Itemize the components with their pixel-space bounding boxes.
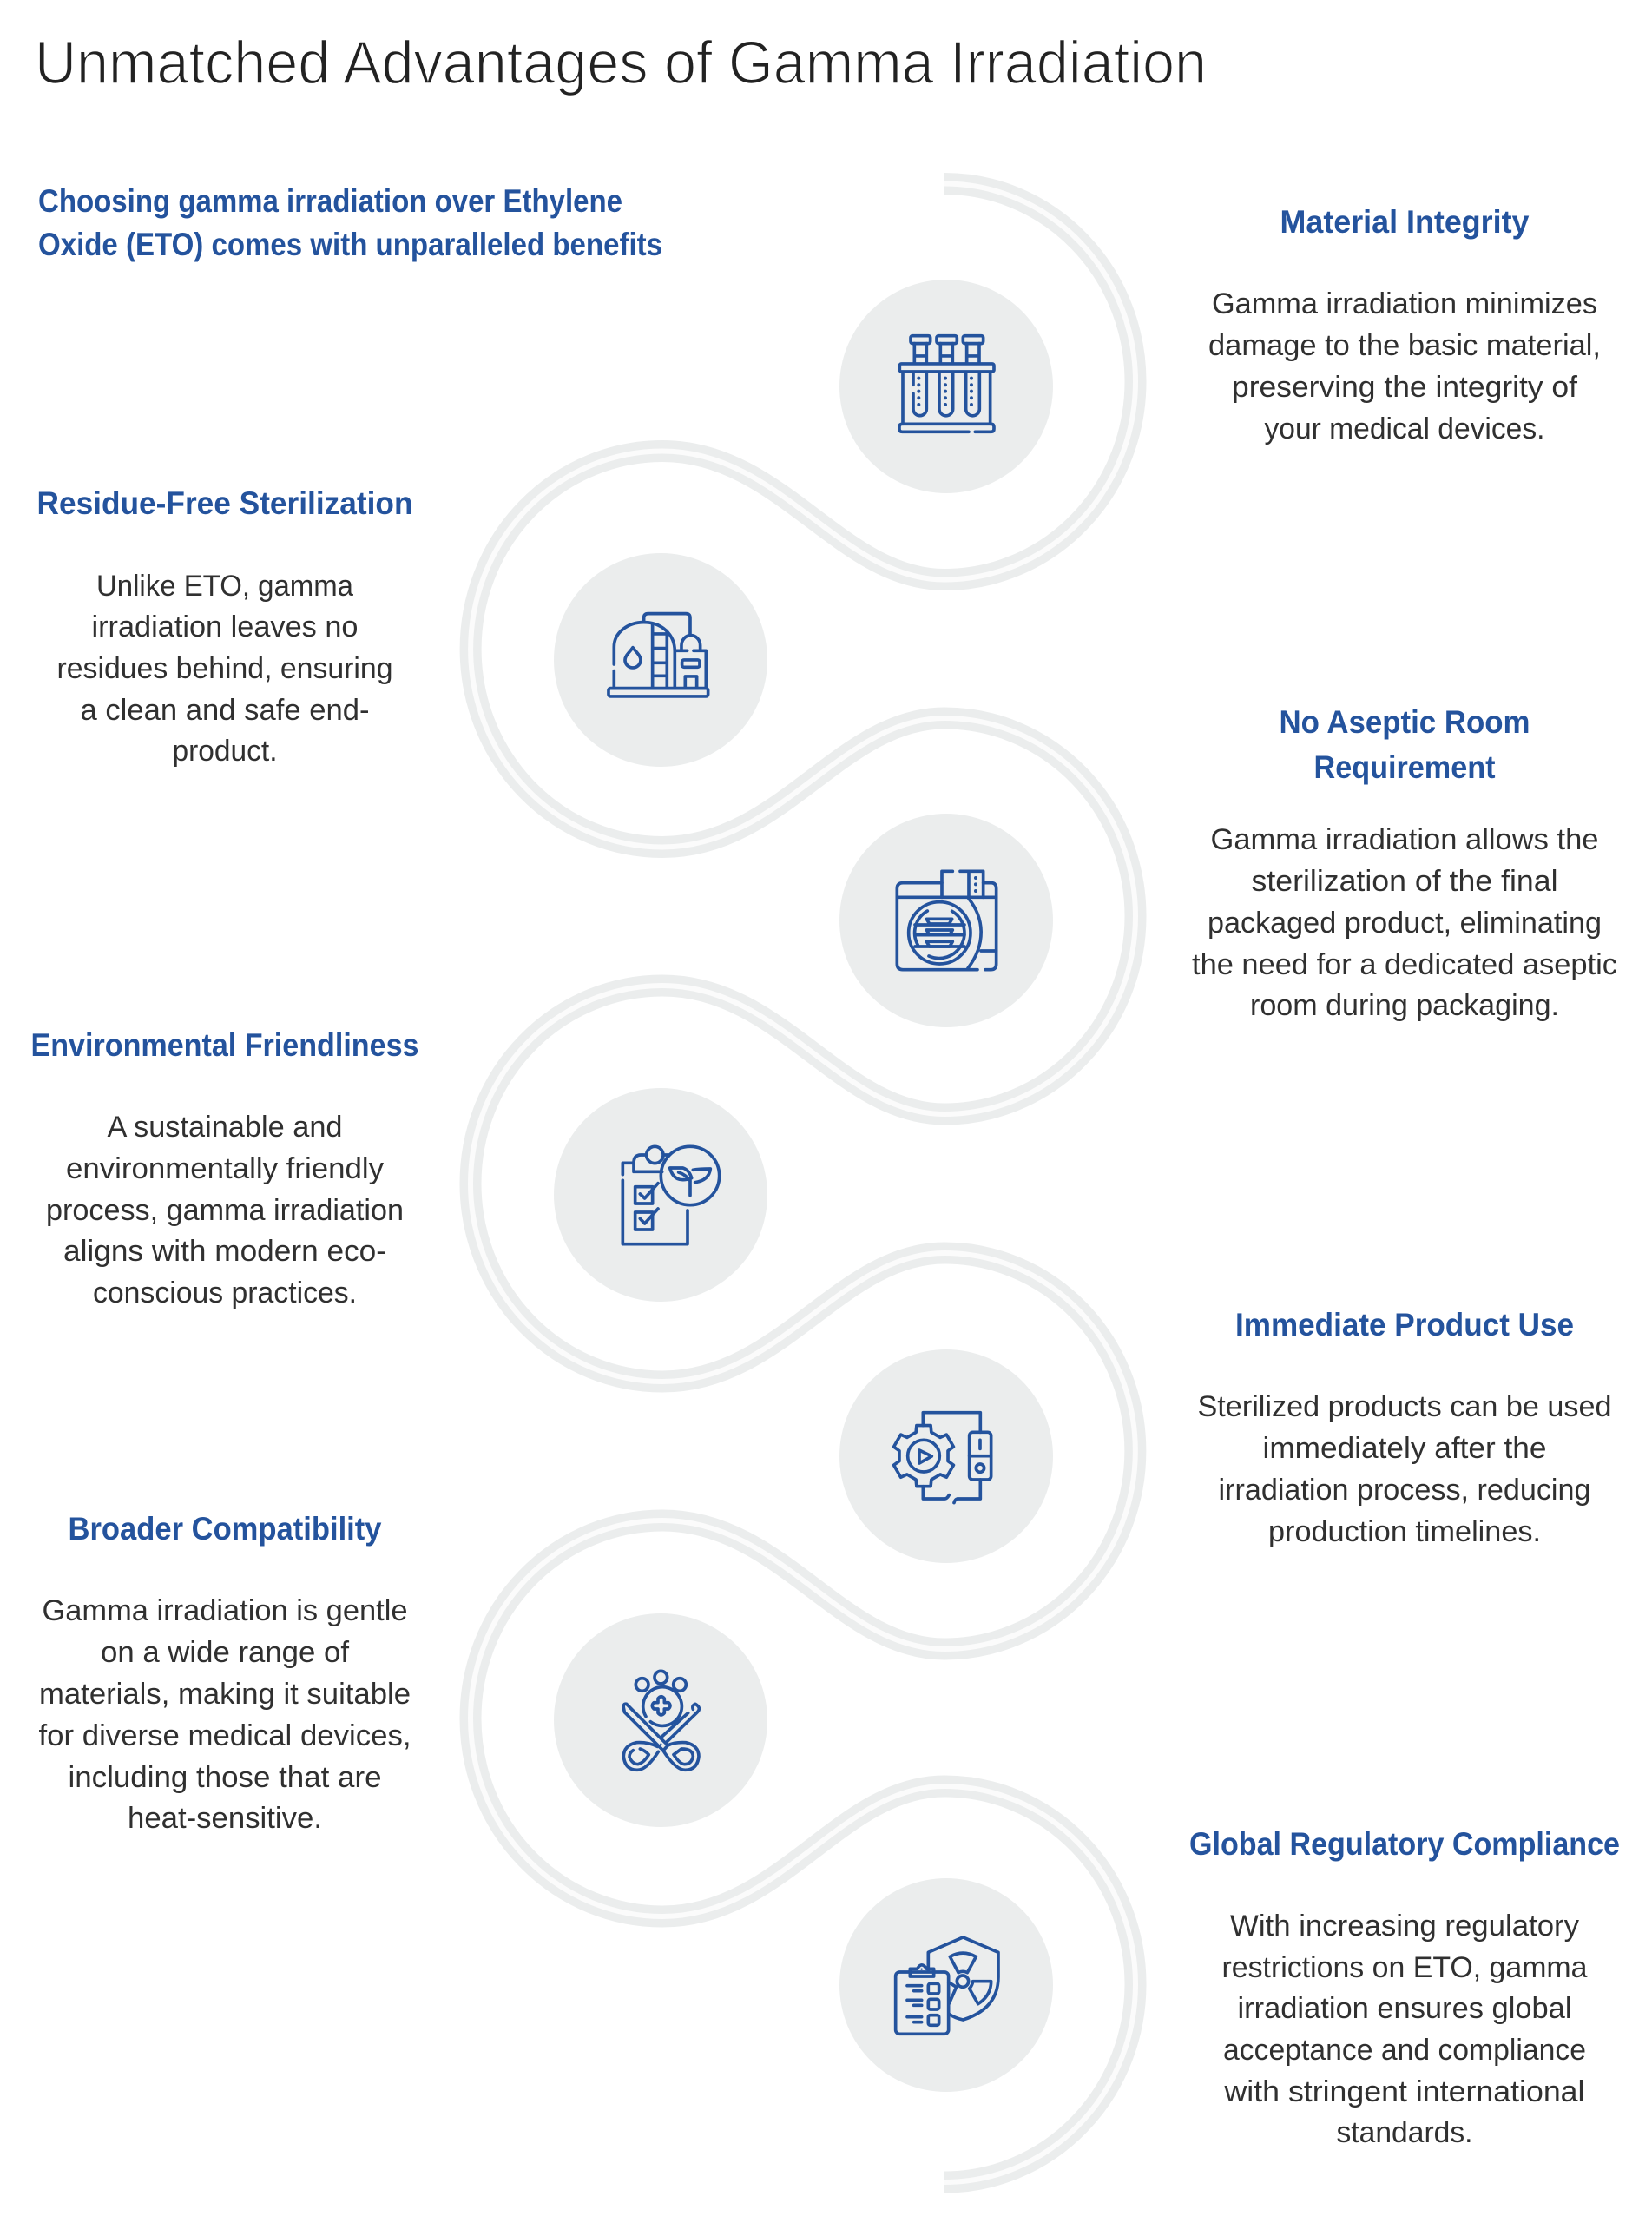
- heading: Material Integrity: Material Integrity: [1280, 204, 1530, 240]
- text: Material Integrity body: Gamma irradiation minimizes: [1212, 287, 1597, 320]
- icon: refinery tank with droplet: [609, 614, 708, 696]
- subtitle: [38, 183, 662, 262]
- text: Immediate Product Use body: production timelines.: [1268, 1515, 1541, 1548]
- text: No Aseptic Room body: room during packaging.: [1250, 989, 1559, 1022]
- text: Broader Compatibility body: on a wide range of: [101, 1636, 350, 1669]
- text: Broader Compatibility body: heat-sensitive.: [128, 1802, 322, 1835]
- text: Material Integrity body: damage to the basic material,: [1208, 329, 1601, 362]
- text: Global Regulatory Compliance body: irradiation ensures global: [1238, 1992, 1571, 2025]
- panel: No Aseptic Room Requirement: [1192, 704, 1617, 1022]
- text: Global Regulatory Compliance body: [1222, 1910, 1588, 2149]
- text: Broader Compatibility body: [38, 1594, 411, 1835]
- panel: Global Regulatory Compliance: [1189, 1826, 1620, 2149]
- panel: Residue-Free Sterilization: [36, 485, 413, 768]
- text: Environmental body: process, gamma irradiation: [46, 1194, 404, 1227]
- text: No Aseptic Room body: the need for a dedicated aseptic: [1192, 948, 1617, 981]
- text: Residue-Free body: irradiation leaves no: [92, 610, 359, 643]
- icon: test tube rack: [899, 336, 994, 432]
- panel: Environmental Friendliness: [31, 1027, 418, 1309]
- text: Broader Compatibility body: for diverse medical devices,: [38, 1719, 411, 1752]
- text: Environmental body: aligns with modern eco-: [63, 1235, 386, 1268]
- text: Global Regulatory Compliance body: restrictions on ETO, gamma: [1222, 1951, 1588, 1984]
- text: Immediate Product Use body: irradiation process, reducing: [1219, 1474, 1590, 1507]
- icon circle: test tubes: [839, 280, 1053, 493]
- subtitle: Choosing gamma irradiation over Ethylene: [38, 183, 622, 219]
- text: Residue-Free body: Unlike ETO, gamma: [96, 570, 353, 603]
- heading: No Aseptic Room Requirement: [1280, 704, 1530, 785]
- text: Environmental body: environmentally friendly: [66, 1152, 384, 1185]
- icon: autoclave sterilizer: [897, 871, 997, 970]
- heading: Environmental Friendliness: Environmental Friendliness: [31, 1027, 418, 1063]
- icon circle: autoclave: [839, 814, 1053, 1027]
- text: Broader Compatibility body: materials, making it suitable: [39, 1678, 411, 1711]
- heading: No Aseptic Room Requirement: Requirement: [1314, 749, 1495, 785]
- text: Broader Compatibility body: Gamma irradiation is gentle: [42, 1594, 408, 1627]
- icon circle: gear and switch: [839, 1349, 1053, 1563]
- icon: clipboard and radiation shield: [896, 1937, 998, 2034]
- panel: Immediate Product Use: [1198, 1307, 1611, 1548]
- panel: Broader Compatibility: [38, 1511, 411, 1835]
- text: No Aseptic Room body: [1192, 823, 1617, 1022]
- icon circle: eco checklist: [554, 1088, 767, 1302]
- text: Material Integrity body: preserving the integrity of: [1232, 371, 1578, 404]
- title: Unmatched Advantages of Gamma Irradiation: [35, 29, 1207, 96]
- serpentine ribbon connector: [471, 184, 1135, 2182]
- text: No Aseptic Room body: Gamma irradiation allows the: [1210, 823, 1599, 856]
- icon: checklist with plant: [622, 1146, 720, 1244]
- text: Residue-Free body: [57, 570, 392, 768]
- text: Global Regulatory Compliance body: With increasing regulatory: [1230, 1910, 1579, 1943]
- text: Residue-Free body: a clean and safe end-: [80, 694, 370, 727]
- text: Residue-Free body: product.: [172, 735, 278, 768]
- icon circle: radiation shield: [839, 1878, 1053, 2092]
- text: Residue-Free body: residues behind, ensuring: [57, 652, 392, 685]
- subtitle: Oxide (ETO) comes with unparalleled benefits: [38, 227, 662, 262]
- text: Immediate Product Use body: immediately after the: [1262, 1432, 1547, 1465]
- icon: scissors with medical cross: [623, 1671, 699, 1770]
- text: No Aseptic Room body: sterilization of the final: [1252, 865, 1557, 898]
- icon circle: refinery tank: [554, 553, 767, 767]
- text: Material Integrity body: your medical devices.: [1264, 412, 1545, 445]
- icon circle: surgical scissors: [554, 1613, 767, 1827]
- heading: Immediate Product Use: Immediate Product Use: [1235, 1307, 1574, 1342]
- heading: Broader Compatibility: Broader Compatibility: [68, 1511, 382, 1547]
- heading: No Aseptic Room Requirement: No Aseptic Room: [1280, 704, 1530, 740]
- heading: Global Regulatory Compliance: Global Regulatory Compliance: [1189, 1826, 1620, 1862]
- text: Global Regulatory Compliance body: acceptance and compliance: [1223, 2034, 1586, 2067]
- panel: Material Integrity: [1208, 204, 1601, 445]
- text: Immediate Product Use body: [1198, 1390, 1611, 1548]
- text: No Aseptic Room body: packaged product, eliminating: [1208, 907, 1602, 940]
- text: Immediate Product Use body: Sterilized products can be used: [1198, 1390, 1611, 1423]
- icon: gear with play button and switch: [894, 1413, 991, 1503]
- text: Global Regulatory Compliance body: standards.: [1337, 2116, 1472, 2149]
- text: Material Integrity body: [1208, 287, 1601, 445]
- text: Environmental body: [46, 1111, 404, 1309]
- text: Environmental body: conscious practices.: [93, 1276, 357, 1309]
- text: Broader Compatibility body: including those that are: [68, 1761, 382, 1794]
- heading: Residue-Free Sterilization: Residue-Free Sterilization: [36, 485, 413, 521]
- text: Environmental body: A sustainable and: [108, 1111, 343, 1144]
- text: Global Regulatory Compliance body: with stringent international: [1223, 2075, 1585, 2108]
